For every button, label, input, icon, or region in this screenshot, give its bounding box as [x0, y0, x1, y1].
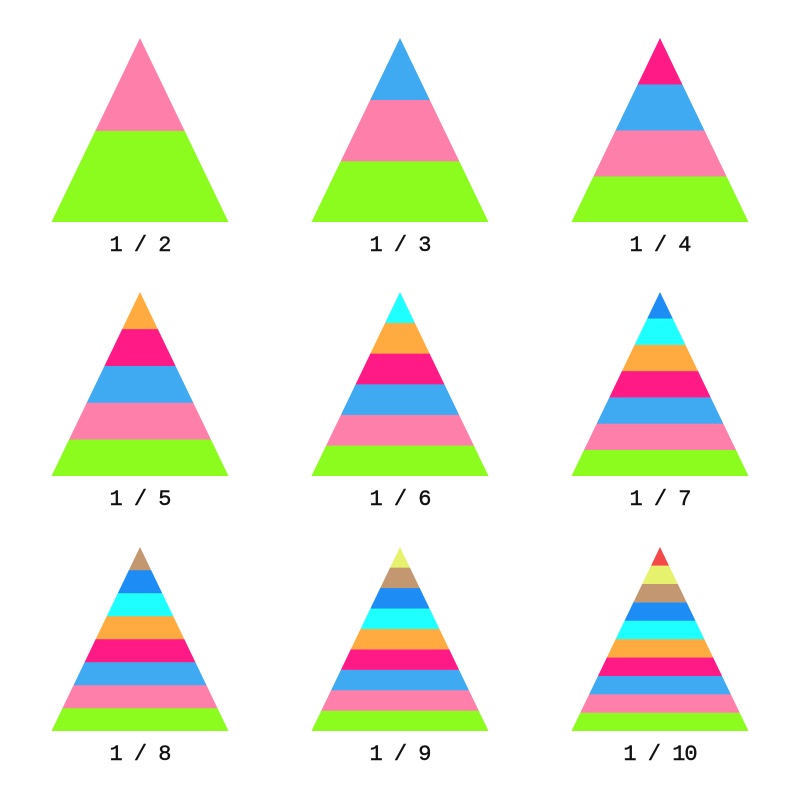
label 1/9: 1 / 9	[369, 742, 431, 767]
label 1/2: 1 / 2	[109, 233, 171, 258]
pyramid 1/7	[570, 292, 750, 476]
label 1/6: 1 / 6	[369, 487, 431, 512]
pyramid 1/10	[570, 547, 750, 731]
label 1/4: 1 / 4	[629, 233, 691, 258]
pyramid 1/3	[310, 38, 490, 223]
pyramid 1/9	[310, 547, 490, 731]
pyramid 1/2	[50, 38, 230, 223]
label 1/10: 1 / 10	[623, 742, 697, 767]
label 1/8: 1 / 8	[109, 742, 171, 767]
pyramid 1/8	[50, 547, 230, 731]
pyramid 1/6	[310, 292, 490, 476]
label 1/5: 1 / 5	[109, 487, 171, 512]
label 1/3: 1 / 3	[369, 233, 431, 258]
label 1/7: 1 / 7	[629, 487, 691, 512]
pyramid 1/5	[50, 292, 230, 476]
pyramid 1/4	[570, 38, 750, 222]
